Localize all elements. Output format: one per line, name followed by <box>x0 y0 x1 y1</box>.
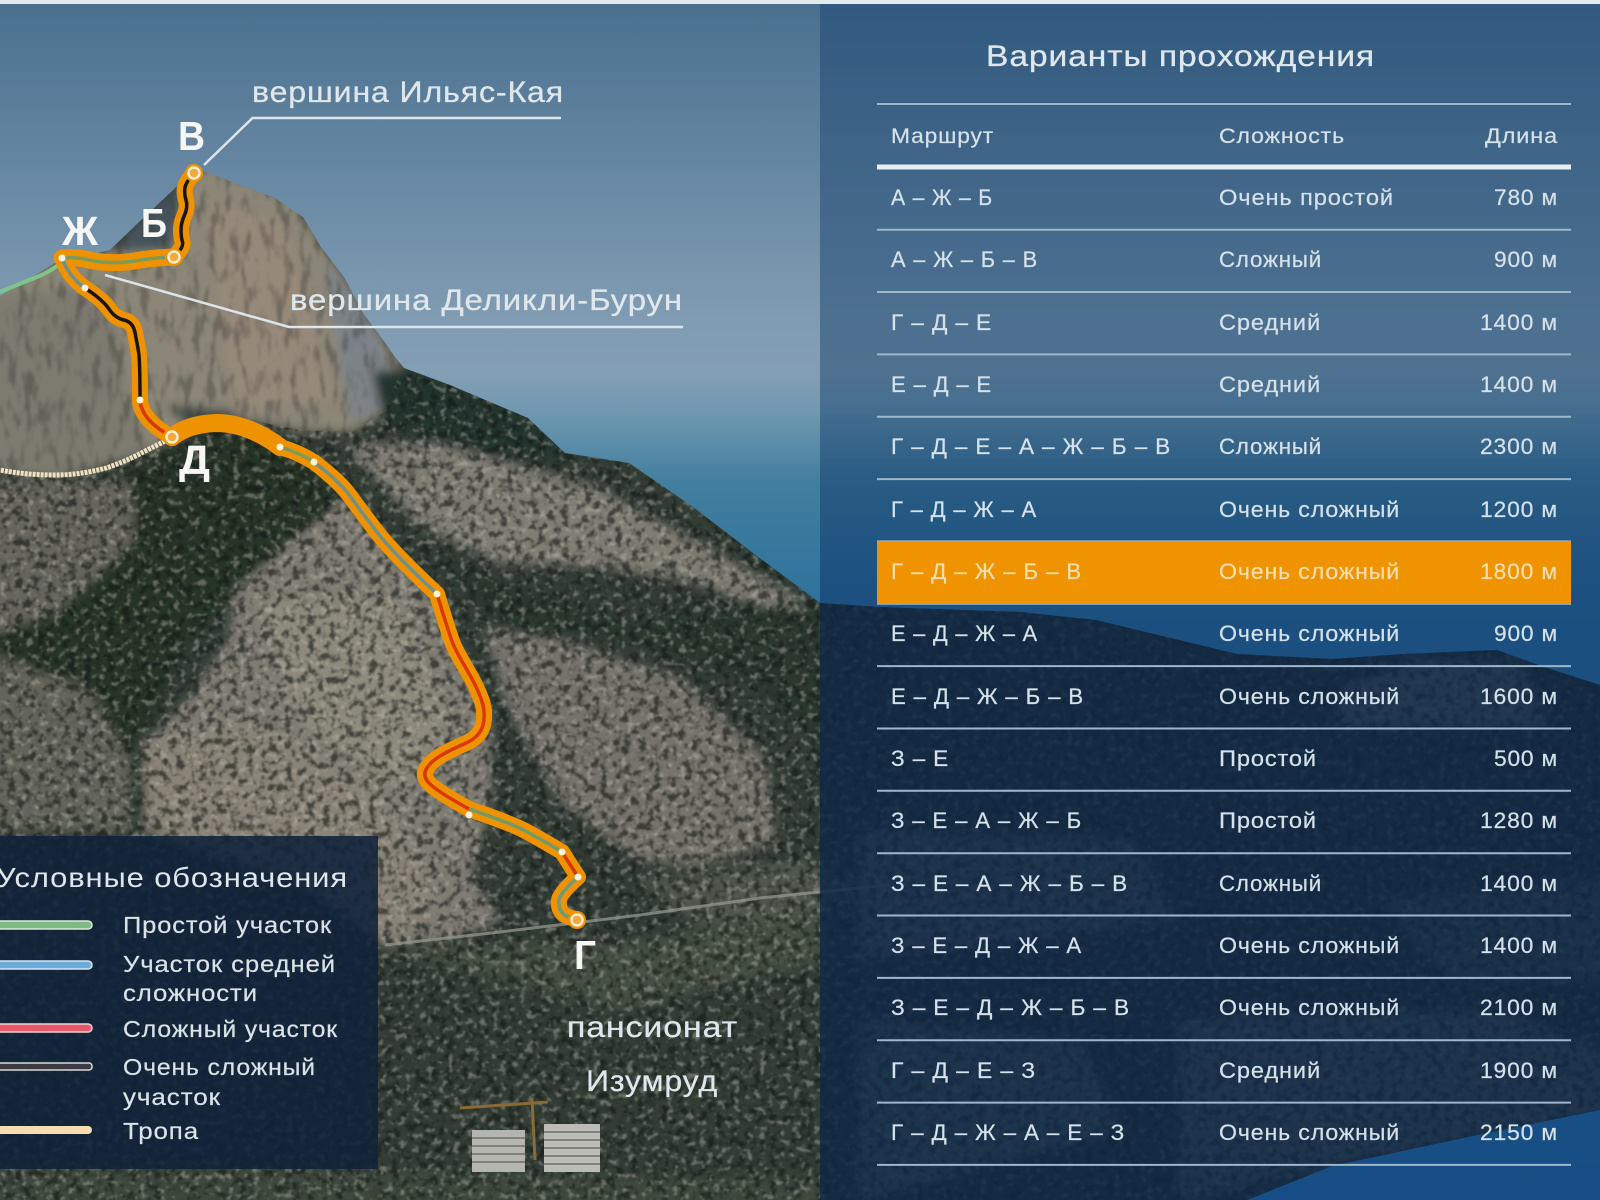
row: Z-E-A-Zh-B <box>891 808 1558 833</box>
row: Z-E: З – Е <box>891 746 949 771</box>
row: G-D-Zh-A: Очень сложный <box>1219 497 1400 522</box>
row: Z-E-A-Zh-B-V: З – Е – А – Ж – Б – В <box>891 871 1128 896</box>
row: Z-E-A-Zh-B-V: 1400 м <box>1480 871 1558 896</box>
route segments by difficulty <box>62 173 578 917</box>
row: G-D-E-A-Zh-B-V: Г – Д – Е – А – Ж – Б – В <box>891 434 1171 459</box>
row: G-D-E-Z <box>891 1058 1558 1083</box>
legend item: footpath: Тропа <box>123 1118 199 1144</box>
row: G-D-Zh-A-E-Z: 2150 м <box>1480 1120 1558 1145</box>
label: Izumrud boarding house <box>567 1011 738 1098</box>
legend item: medium section <box>0 951 336 1006</box>
row: G-D-E: Г – Д – Е <box>891 310 992 335</box>
legend heading: Условные обозначения <box>0 862 348 893</box>
legend item: hard section: Сложный участок <box>123 1016 338 1042</box>
waypoint letter V: В <box>178 113 205 159</box>
road along the foot of the mountain <box>385 885 890 945</box>
legend item: very hard section: Очень сложный <box>123 1054 316 1080</box>
table header: Маршрут <box>891 125 994 148</box>
row: E-D-Zh-A: 900 м <box>1494 621 1558 646</box>
table rules <box>877 104 1571 1165</box>
legend item: easy section: Простой участок <box>123 912 332 938</box>
label: Izumrud boarding house: Изумруд <box>586 1065 718 1098</box>
row: G-D-E <box>891 310 1558 335</box>
row: A-Zh-B: А – Ж – Б <box>891 185 993 210</box>
legend item: very hard section <box>0 1054 316 1110</box>
route: orange highlighted path <box>62 173 578 919</box>
legend item: very hard section: участок <box>123 1084 221 1110</box>
row: Z-E-D-Zh-A: Очень сложный <box>1219 933 1400 958</box>
apartment buildings and crane <box>460 1098 600 1172</box>
row: A-Zh-B: Очень простой <box>1219 185 1394 210</box>
row: Z-E: 500 м <box>1494 746 1558 771</box>
row: E-D-Zh-B-V: Очень сложный <box>1219 684 1400 709</box>
row: G-D-Zh-B-V highlighted: Г – Д – Ж – Б – В <box>891 559 1082 584</box>
row: G-D-Zh-A: 1200 м <box>1480 497 1558 522</box>
row: Z-E-A-Zh-B-V <box>891 871 1558 896</box>
row: G-D-Zh-A: Г – Д – Ж – А <box>891 497 1037 522</box>
row: Z-E-A-Zh-B: З – Е – А – Ж – Б <box>891 808 1082 833</box>
row: G-D-E: Средний <box>1219 310 1321 335</box>
callout: Ilyas-Kaya peak <box>204 76 564 165</box>
top light strip <box>0 0 1600 4</box>
table header <box>891 125 1558 148</box>
waypoint letter G: Г <box>574 932 596 978</box>
table: route options <box>877 104 1571 1165</box>
row: Z-E-A-Zh-B: Простой <box>1219 808 1317 833</box>
row: Z-E <box>891 746 1558 771</box>
row: Z-E-D-Zh-B-V: З – Е – Д – Ж – Б – В <box>891 995 1130 1020</box>
row: G-D-E-A-Zh-B-V: 2300 м <box>1480 434 1558 459</box>
row: G-D-E-Z: 1900 м <box>1480 1058 1558 1083</box>
row: G-D-E-Z: Средний <box>1219 1058 1321 1083</box>
row: Z-E-A-Zh-B-V: Сложный <box>1219 871 1322 896</box>
row: G-D-E-Z: Г – Д – Е – З <box>891 1058 1036 1083</box>
legend item: medium section: Участок средней <box>123 951 336 977</box>
waypoint letter D: Д <box>179 437 210 483</box>
row: E-D-E: Средний <box>1219 372 1321 397</box>
row: E-D-E: 1400 м <box>1480 372 1558 397</box>
row: E-D-Zh-A: Е – Д – Ж – А <box>891 621 1038 646</box>
row: G-D-Zh-A-E-Z: Очень сложный <box>1219 1120 1400 1145</box>
row: Z-E-D-Zh-A: 1400 м <box>1480 933 1558 958</box>
row: G-D-Zh-A <box>891 497 1558 522</box>
waypoint letter B: Б <box>141 200 167 246</box>
row: G-D-E-A-Zh-B-V <box>891 434 1558 459</box>
row: E-D-Zh-B-V: Е – Д – Ж – Б – В <box>891 684 1084 709</box>
waypoint letter Zh: Ж <box>61 208 99 254</box>
row: A-Zh-B-V: 900 м <box>1494 247 1558 272</box>
legend item: footpath <box>0 1118 199 1144</box>
table header: Длина <box>1485 125 1558 148</box>
row: E-D-Zh-A: Очень сложный <box>1219 621 1400 646</box>
row: G-D-Zh-A-E-Z <box>891 1120 1558 1145</box>
legend item: medium section: сложности <box>123 980 258 1006</box>
row: G-D-Zh-B-V highlighted: Очень сложный <box>1219 559 1400 584</box>
route waypoints <box>58 164 586 929</box>
highlighted row background <box>877 541 1571 604</box>
legend item: hard section <box>0 1016 338 1042</box>
label: Izumrud boarding house: пансионат <box>567 1011 738 1044</box>
row: Z-E: Простой <box>1219 746 1317 771</box>
row: Z-E-D-Zh-B-V: 2100 м <box>1480 995 1558 1020</box>
panel: legend <box>0 836 378 1169</box>
footpath from D to left edge <box>0 437 172 475</box>
row: A-Zh-B-V <box>891 247 1558 272</box>
row: G-D-Zh-A-E-Z: Г – Д – Ж – А – Е – З <box>891 1120 1125 1145</box>
row: E-D-E <box>891 372 1558 397</box>
row: A-Zh-B: 780 м <box>1494 185 1558 210</box>
row: E-D-Zh-B-V: 1600 м <box>1480 684 1558 709</box>
row: A-Zh-B <box>891 185 1558 210</box>
thin simple trail from Zh to left edge <box>0 262 62 292</box>
row: G-D-E: 1400 м <box>1480 310 1558 335</box>
row: E-D-Zh-A <box>891 621 1558 646</box>
row: Z-E-D-Zh-B-V: Очень сложный <box>1219 995 1400 1020</box>
row: G-D-E-A-Zh-B-V: Сложный <box>1219 434 1322 459</box>
panel tint over land <box>820 603 1600 1200</box>
row: G-D-Zh-B-V highlighted: 1800 м <box>1480 559 1558 584</box>
row: A-Zh-B-V: А – Ж – Б – В <box>891 247 1038 272</box>
callout: Delikli-Burun peak <box>105 275 683 327</box>
row: A-Zh-B-V: Сложный <box>1219 247 1322 272</box>
row: E-D-Zh-B-V <box>891 684 1558 709</box>
legend item: easy section <box>0 912 332 938</box>
row: E-D-E: Е – Д – Е <box>891 372 992 397</box>
panel: route options overlay <box>820 4 1600 1200</box>
callout: Ilyas-Kaya peak: вершина Ильяс-Кая <box>252 76 564 109</box>
row: Z-E-D-Zh-A: З – Е – Д – Ж – А <box>891 933 1082 958</box>
callout: Delikli-Burun peak: вершина Деликли-Бурун <box>290 284 683 317</box>
table header: Сложность <box>1219 125 1345 148</box>
row: Z-E-A-Zh-B: 1280 м <box>1480 808 1558 833</box>
panel heading: route options: Варианты прохождения <box>986 40 1375 73</box>
row: G-D-Zh-B-V highlighted <box>891 559 1558 584</box>
table header rule <box>877 164 1571 170</box>
row: Z-E-D-Zh-A <box>891 933 1558 958</box>
row: Z-E-D-Zh-B-V <box>891 995 1558 1020</box>
